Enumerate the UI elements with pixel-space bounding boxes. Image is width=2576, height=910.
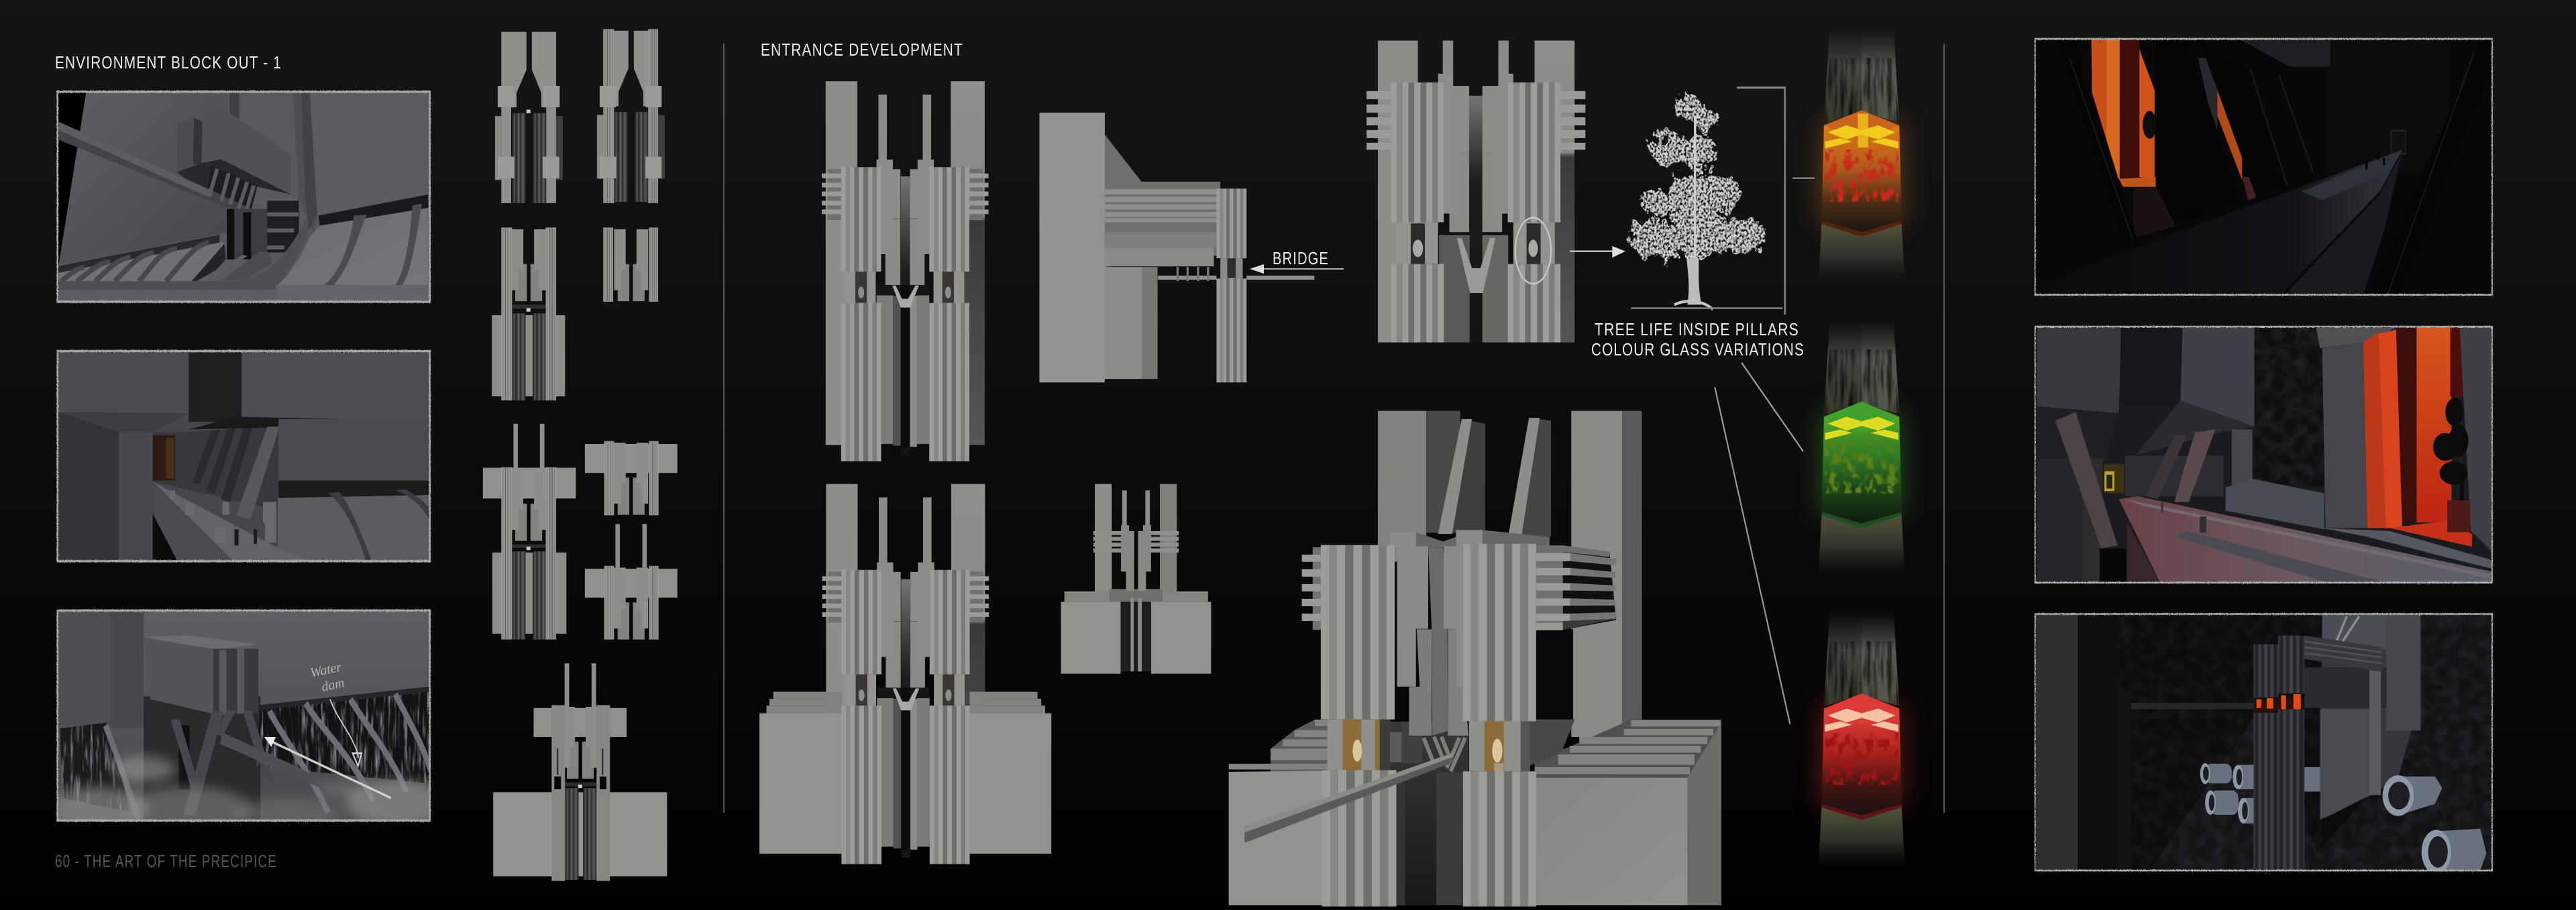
- left fins: [1302, 547, 1321, 630]
- frame: exterior render: [2035, 614, 2492, 870]
- side elevation: bridge connection: [1039, 113, 1314, 382]
- frame: bridge render: [2035, 327, 2492, 583]
- panel: block out render 1: [58, 92, 429, 302]
- left column of block-out renders and plans: [50, 29, 678, 881]
- plan: winged pillars with base and spikes: [483, 424, 576, 640]
- core left block: [1390, 532, 1448, 736]
- right fins: [1536, 545, 1616, 630]
- plan: tapered block study: [495, 32, 563, 203]
- divider: right: [1943, 44, 1945, 813]
- panel: dark render with orange doorway: [2036, 40, 2491, 294]
- perspective render: towers, steps and base blocks: [1229, 411, 1721, 905]
- frame: render 2: [58, 351, 430, 561]
- heading: entrance development: ENTRANCE DEVELOPMENT: [761, 40, 963, 60]
- support struts: [1424, 737, 1465, 771]
- annotation: handwritten water dam note: dam: [320, 675, 345, 695]
- pipes: [2200, 763, 2486, 874]
- elevation: small entrance with base: [1061, 484, 1211, 674]
- plan: ribbed pillars with base: [492, 227, 565, 400]
- plan: short winged pillars with spikes: [585, 524, 678, 640]
- frame: dark render: [2035, 39, 2492, 295]
- illustration: tree: [1629, 93, 1768, 309]
- right column of lit renders: [2035, 39, 2492, 874]
- panel: bridge render with red doorway: [2036, 327, 2491, 583]
- annotation: handwritten water dam note: [309, 660, 346, 696]
- divider: left: [723, 44, 724, 813]
- plan: wide base block with pillars: [493, 663, 667, 881]
- panel: exterior render with pipes: [2036, 614, 2491, 874]
- frame: render 1: [58, 92, 430, 302]
- leader line: to green pillar: [1741, 363, 1803, 451]
- stepped plinth right of core: [1530, 720, 1575, 766]
- core top band: [1416, 530, 1550, 547]
- pillar: red glass: [1819, 612, 1905, 868]
- perspective render: ribbed columns, core blocks and bridge: [1244, 530, 1616, 907]
- plan: short winged pillars: [585, 441, 678, 515]
- arrow: to tree detail: [1570, 246, 1625, 258]
- dark base between columns: [1390, 722, 1468, 905]
- annotation: handwritten water dam note: Water: [309, 660, 343, 681]
- label: bridge with arrow: [1250, 248, 1344, 274]
- right column with gold tree niche: [1463, 544, 1536, 907]
- panel: block out render 2: [58, 352, 429, 561]
- pillar: orange glass: [1819, 29, 1905, 284]
- shadow behind core: [1536, 629, 1573, 722]
- elevation: entrance front view: [822, 81, 989, 461]
- label: bridge with arrow: BRIDGE: [1273, 248, 1329, 268]
- plan: short ribbed pillars: [603, 227, 658, 302]
- caption: tree life and glass variations: COLOUR GLASS VARIATIONS: [1591, 339, 1805, 359]
- bridge walkway: [1244, 753, 1454, 843]
- entrance close-ups, tree and glass variations: [1229, 29, 1905, 905]
- pillar: green glass: [1819, 321, 1905, 575]
- footer: page number and book title: 60 - THE ART OF THE PRECIPICE: [55, 851, 277, 871]
- bracket: tree to glass pillar: [1631, 88, 1815, 315]
- panel: block out render 3 with water and fog: [58, 612, 429, 820]
- elevation: close-up with tree niche highlighted: [1366, 41, 1585, 343]
- core right block: [1444, 530, 1483, 736]
- left column with gold tree niche: [1321, 545, 1396, 907]
- heading: environment block out: ENVIRONMENT BLOCK OUT - 1: [55, 52, 282, 72]
- frame: render 3: [58, 610, 430, 821]
- plan: tapered block with ribs: [597, 29, 665, 203]
- caption: tree life and glass variations: TREE LIFE INSIDE PILLARS: [1595, 319, 1799, 339]
- caption: tree life and glass variations: [1591, 319, 1805, 359]
- elevation: entrance with wide base: [759, 484, 1051, 864]
- entrance development drawings: [759, 81, 1314, 864]
- leader line: to red pillar: [1715, 387, 1790, 724]
